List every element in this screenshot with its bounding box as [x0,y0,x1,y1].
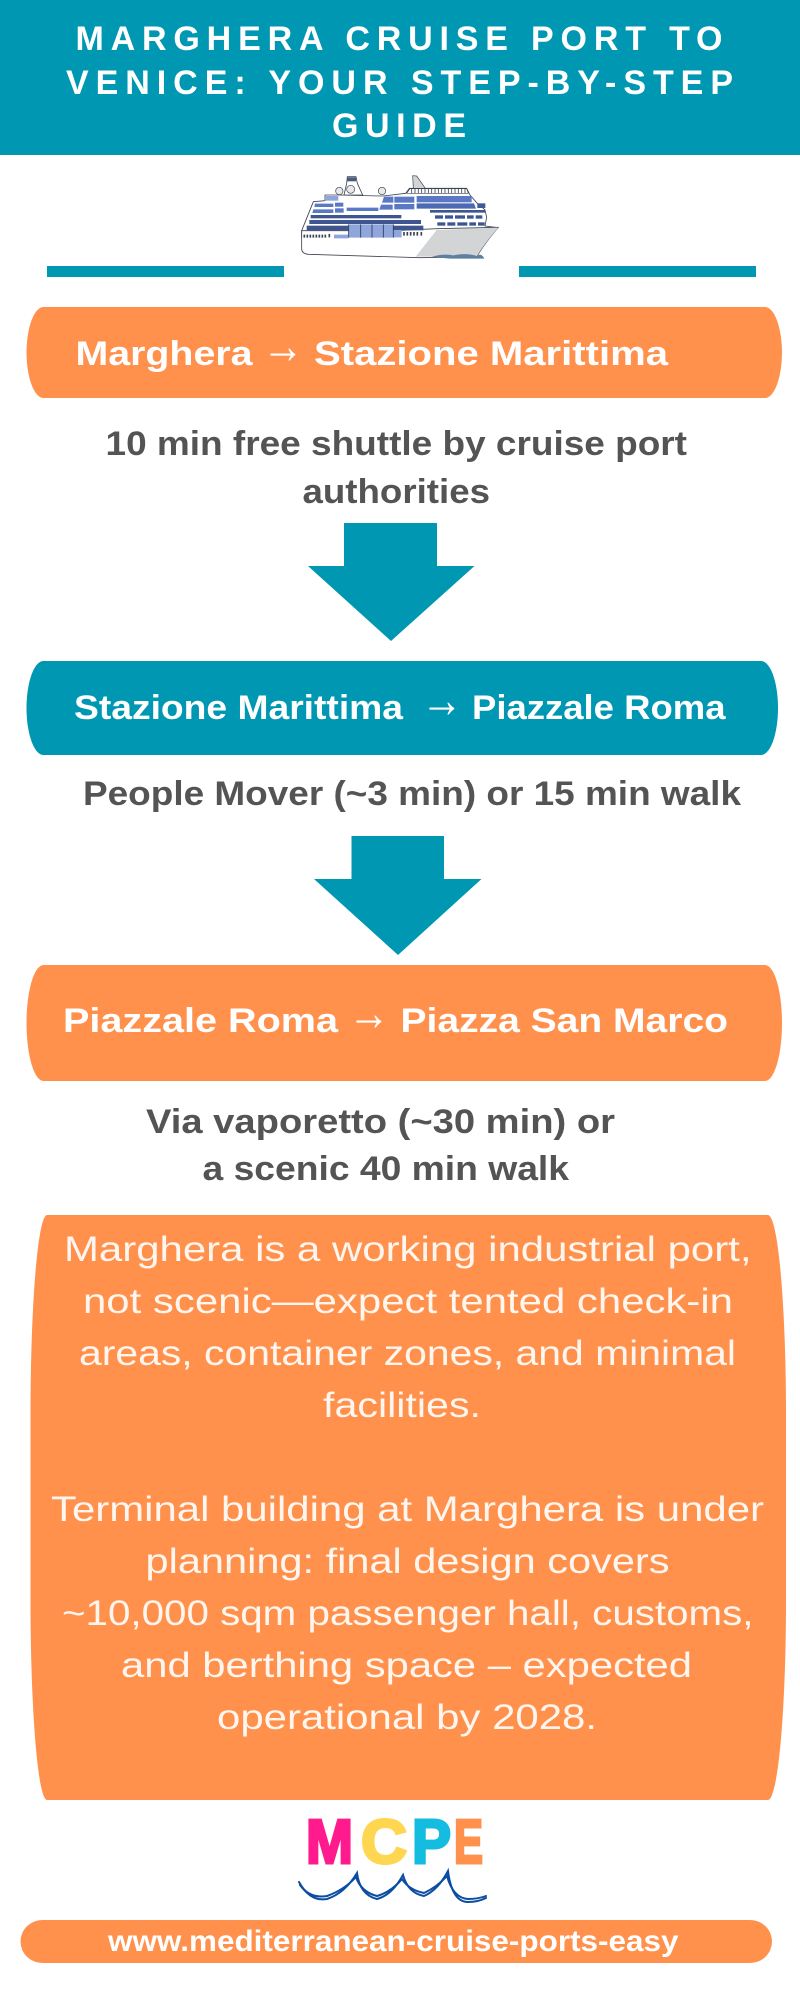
step 3 pill: → [348,985,390,1041]
icon: cruise ship [302,176,498,259]
panel text: Terminal building at Marghera is under [51,1490,764,1529]
panel text: and berthing space – expected [121,1646,692,1685]
step 3 pill: Piazza San Marco [400,1002,728,1040]
step 3 pill: Piazzale Roma [63,1002,339,1040]
step 3 pill [26,965,782,1081]
step 2 pill: Stazione Marittima [74,689,404,727]
title [66,20,733,145]
step 3 description [146,1103,615,1188]
panel text: operational by 2028. [217,1698,597,1737]
arrow 1 [308,523,474,641]
title: VENICE: YOUR STEP-BY-STEP [66,64,733,102]
step 1 description: authorities [302,473,490,511]
panel text: ~10,000 sqm passenger hall, customs, [62,1594,754,1633]
panel text: areas, container zones, and minimal [79,1334,736,1373]
arrow 2 [314,836,482,955]
title: MARGHERA CRUISE PORT TO [76,20,722,58]
panel text: not scenic—expect tented check-in [83,1282,733,1321]
logo waves [299,1871,486,1902]
title: GUIDE [332,107,466,145]
step 1 description [106,425,687,511]
step 2 pill: → [421,672,463,728]
step 3 description: Via vaporetto (~30 min) or [146,1103,615,1141]
panel text: planning: final design covers [146,1542,670,1581]
header banner with title [0,0,800,155]
panel: port notes [30,1215,786,1800]
logo: MCPE: M [306,1808,353,1877]
step 2 pill: Piazzale Roma [472,689,727,727]
divider left [47,266,284,277]
step 2 description: People Mover (~3 min) or 15 min walk [83,775,741,813]
panel text: facilities. [323,1386,481,1425]
logo: MCPE: C [361,1808,407,1877]
footer url pill: www.mediterranean-cruise-ports-easy [107,1925,679,1958]
panel text: Marghera is a working industrial port, [64,1230,751,1269]
logo: MCPE: P [412,1808,451,1877]
logo: MCPE: E [454,1808,483,1877]
panel text [51,1230,764,1737]
divider right [519,266,756,277]
step 1 pill: Stazione Marittima [314,335,669,373]
step 3 description: a scenic 40 min walk [202,1150,569,1188]
step 2 pill [26,661,778,755]
logo: MCPE [299,1808,486,1902]
footer url pill [20,1920,772,1963]
step 1 pill [26,307,782,398]
step 1 description: 10 min free shuttle by cruise port [106,425,687,463]
step 1 pill: → [262,318,304,374]
step 1 pill: Marghera [76,335,254,373]
